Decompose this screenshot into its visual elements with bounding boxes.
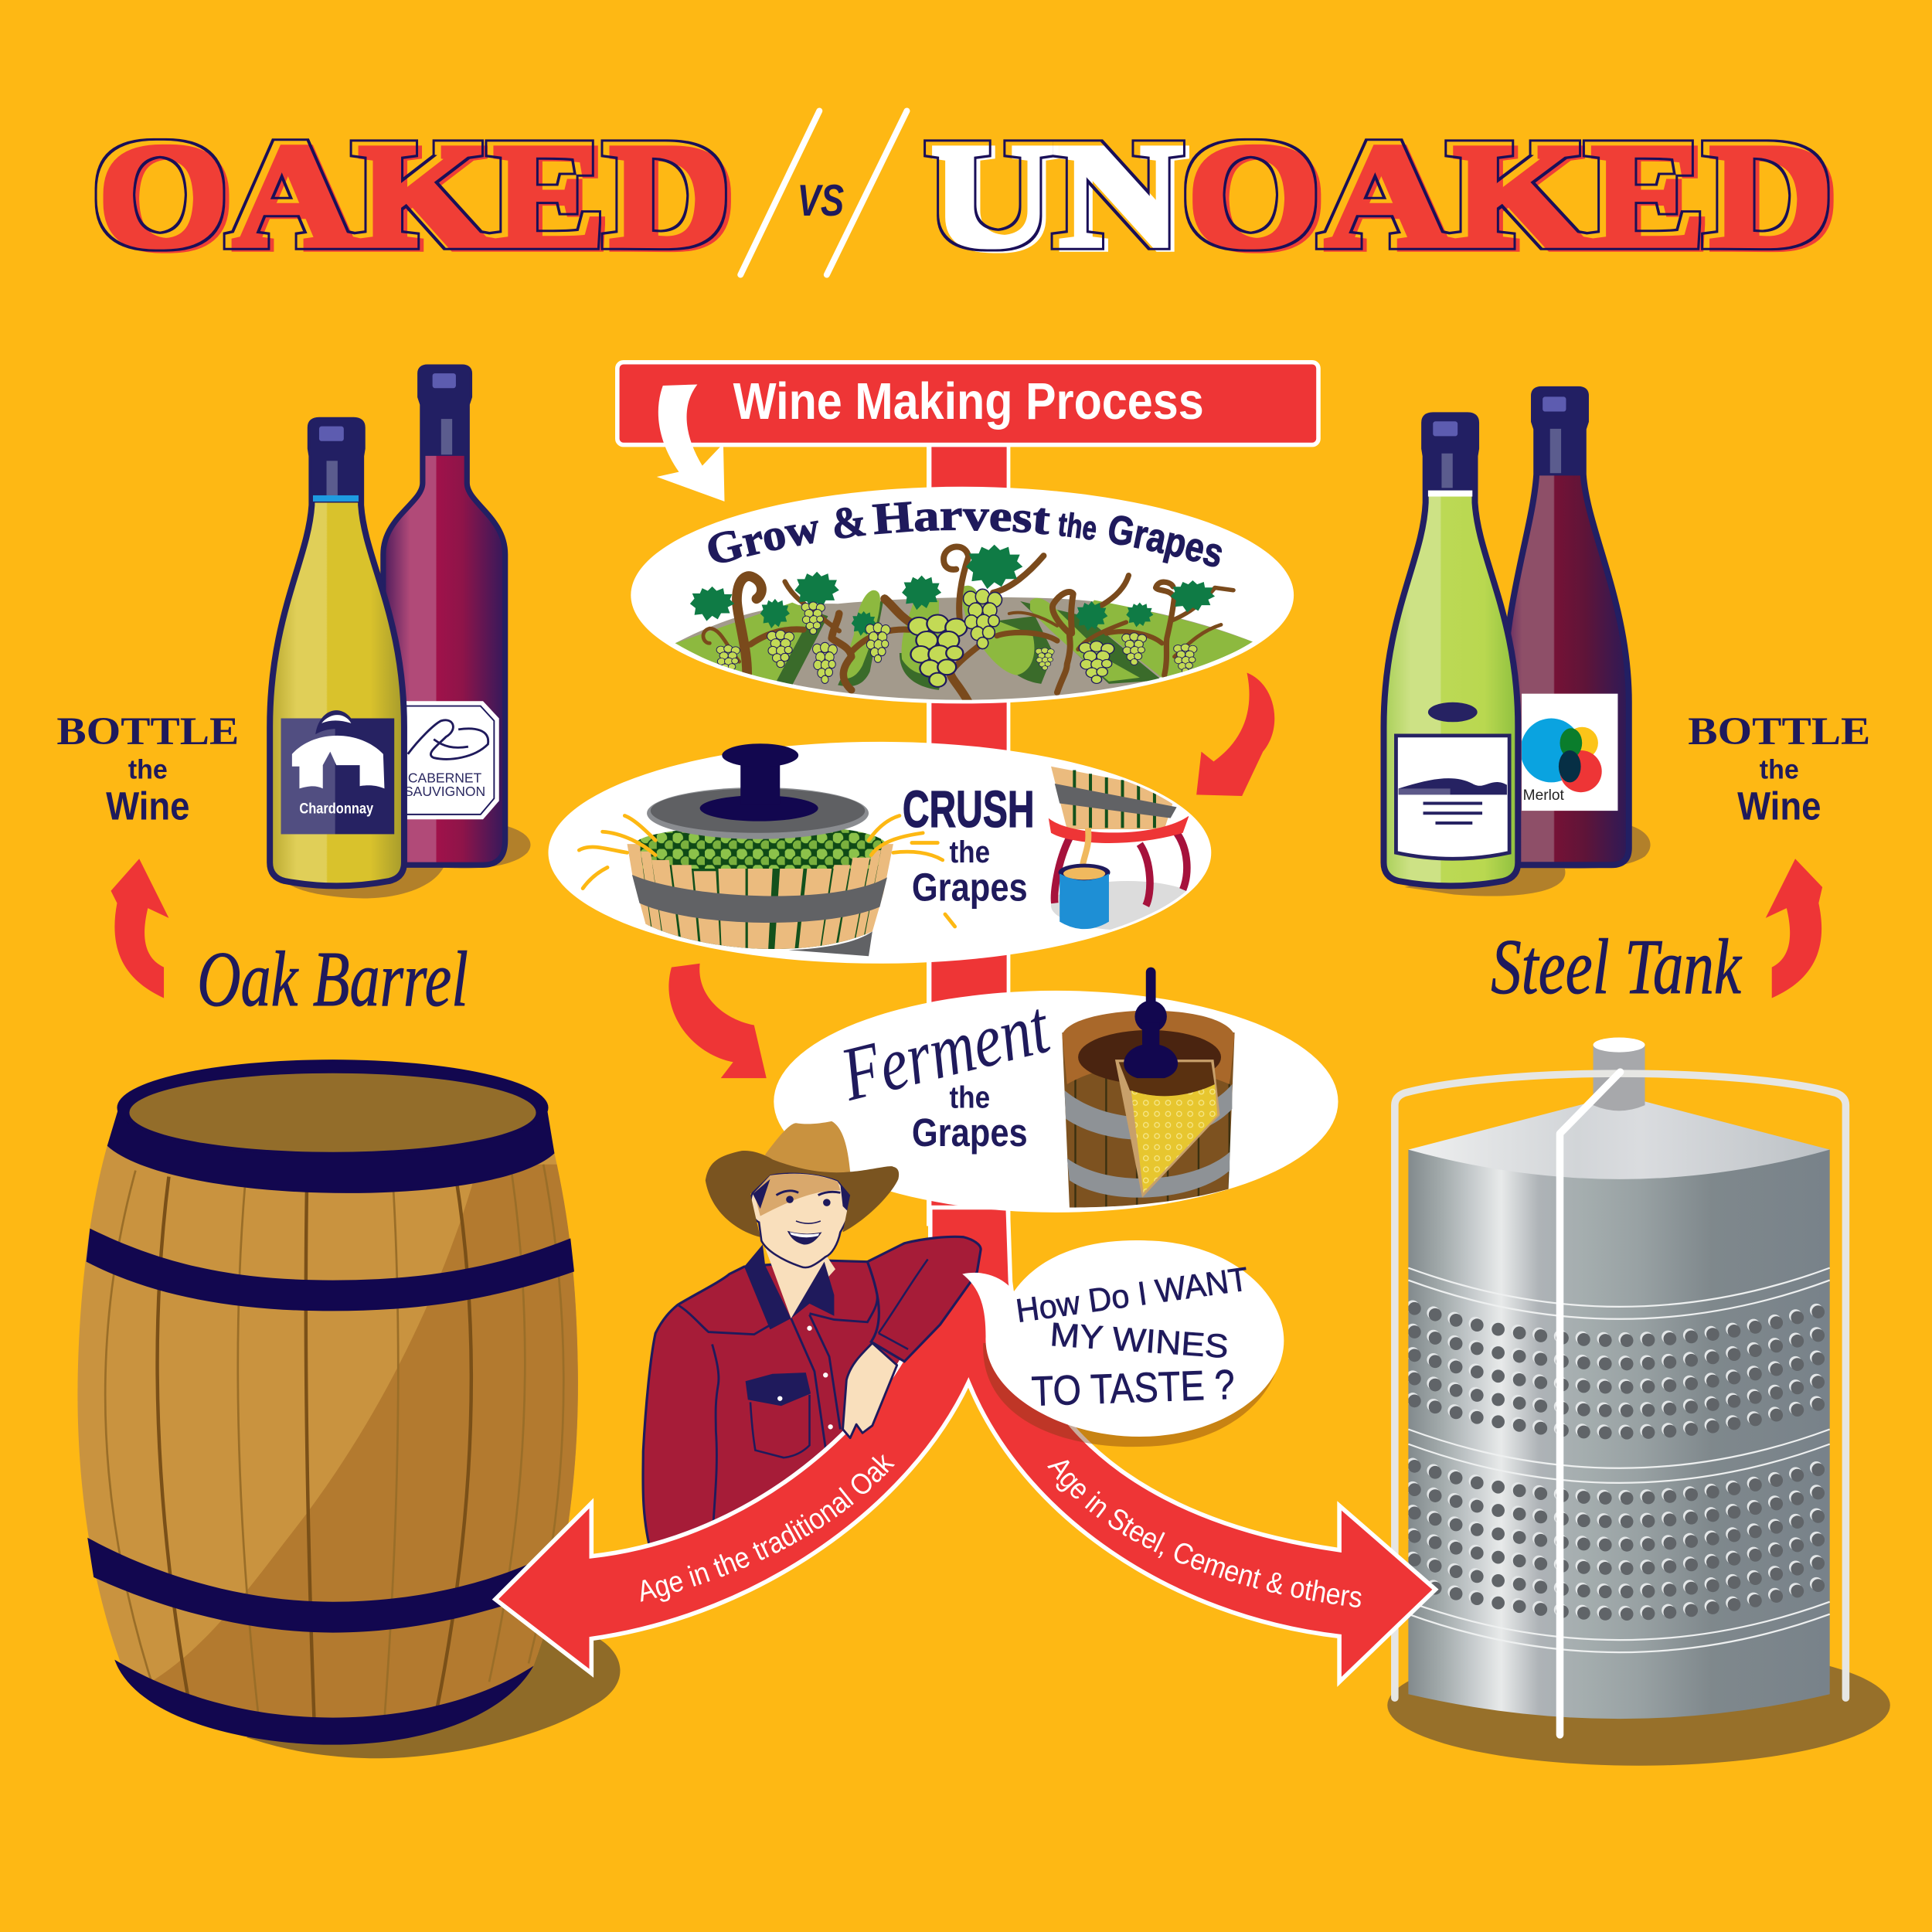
bubble text (1014, 1260, 1250, 1415)
process post (927, 437, 1010, 1226)
hair (753, 1179, 852, 1213)
perforations (1413, 1307, 1830, 1614)
crush text: Grapes (912, 865, 1028, 909)
arrow text: steel: Age in Steel, Cement & others (1047, 1460, 1362, 1607)
hat crown (765, 1121, 850, 1183)
tank body (1408, 1150, 1830, 1719)
tank shadow (1387, 1645, 1890, 1766)
sign: wine making process: Wine Making Process (733, 372, 1204, 430)
arrow text: oak: Age in the traditional Oak (641, 1454, 895, 1602)
hat shadow on forehead (754, 1174, 840, 1216)
crush text: CRUSH (903, 781, 1034, 838)
bubble shadow (983, 1343, 1281, 1447)
bottle the wine: left: Wine (106, 784, 190, 828)
hoop (632, 875, 887, 923)
label: cabernet (402, 701, 499, 819)
curved heading: grow and harvest the grapes: the (1059, 512, 1096, 540)
ferment vat (1062, 968, 1235, 1207)
collar (744, 1244, 834, 1329)
curved heading: grow and harvest the grapes: & (835, 507, 866, 539)
panel: crush (549, 742, 1211, 964)
bottle the wine: right: Wine (1737, 784, 1821, 828)
tank frame (1395, 1072, 1845, 1735)
press lid (647, 743, 869, 839)
arm (867, 1236, 981, 1362)
oak barrel (77, 1060, 620, 1762)
label: chardonnay (281, 710, 394, 834)
panel: ferment (774, 968, 1338, 1213)
arrow: crush to ferment (668, 964, 767, 1078)
small press with bucket (1049, 767, 1204, 930)
label: oak barrel: Oak Barrel (197, 936, 468, 1023)
word: OAKED: OAKED (93, 111, 730, 277)
tank cap (1594, 1037, 1645, 1111)
panel: grow and harvest (631, 487, 1294, 703)
staves (628, 844, 893, 949)
word: UNOAKED: UN OAKED (925, 111, 1832, 277)
juice splashes (579, 815, 955, 927)
double arrow: age in oak, age in steel (492, 1206, 1439, 1687)
tank cone (1408, 1101, 1830, 1179)
pocket (746, 1372, 811, 1458)
label: cabernet: SAUVIGNON (404, 784, 485, 799)
shadow (1405, 823, 1651, 896)
steel tank (1387, 1037, 1890, 1766)
bubble text: How Do I WANT (1014, 1260, 1250, 1330)
label: merlot: Merlot (1523, 787, 1564, 804)
bottle the wine: left (56, 710, 239, 828)
sleeve details (879, 1259, 928, 1349)
vineyard scene (675, 545, 1253, 705)
face (750, 1173, 852, 1267)
label: chardonnay: Chardonnay (299, 801, 373, 817)
bottle the wine: left: BOTTLE (56, 710, 239, 753)
arrow: oak barrel to bottle (111, 859, 168, 998)
label: green bottle (1396, 736, 1509, 859)
label: cabernet: CABERNET (408, 770, 482, 785)
speech bubble (962, 1240, 1284, 1447)
shirt details (678, 1262, 877, 1523)
barrel top (107, 1060, 554, 1193)
buttons (807, 1326, 833, 1429)
bubble text: TO TASTE ? (1031, 1362, 1236, 1415)
barrel hoops (87, 1229, 574, 1745)
bottle the wine: right: BOTTLE (1688, 710, 1870, 753)
barrel body (77, 1146, 591, 1762)
press basket (628, 825, 893, 961)
ferment text: Grapes (912, 1111, 1028, 1155)
bottle: merlot (1503, 389, 1629, 865)
grape pile (636, 825, 886, 893)
sign: wine making process (617, 362, 1318, 445)
barrel shadow (247, 1614, 620, 1758)
curved heading: grow and harvest the grapes (708, 502, 1223, 567)
curved heading: grow and harvest the grapes: Grapes (1109, 515, 1223, 567)
bottle the wine: left: the (128, 755, 168, 785)
left bottles (270, 367, 531, 898)
wedge (788, 931, 872, 956)
ferment text: the (949, 1080, 990, 1114)
farmer head and arm (706, 1121, 981, 1438)
slashes and vs (740, 111, 906, 275)
neck (764, 1244, 835, 1318)
bottle the wine: right (1688, 710, 1870, 828)
crush text (903, 781, 1034, 909)
curved heading: grow and harvest the grapes: Harvest (872, 502, 1050, 535)
bottle: chardonnay (270, 420, 404, 886)
arrow: grow to crush (1196, 673, 1274, 796)
title: Oaked vs Unoaked (93, 111, 1832, 277)
crush text: the (949, 835, 990, 869)
right bottles (1383, 389, 1651, 896)
shadow (290, 823, 531, 898)
farmer torso (643, 1260, 937, 1555)
bubble shape (962, 1240, 1284, 1437)
label: merlot (1520, 694, 1617, 811)
arrow: white, sign to grow (657, 384, 725, 502)
bubble text: MY WINES (1049, 1316, 1230, 1366)
curved heading: grow and harvest the grapes: Grow (708, 521, 818, 563)
bottle the wine: right: the (1760, 755, 1799, 785)
slashes and vs: VS (798, 176, 844, 226)
arrow: steel tank to bottle (1766, 859, 1822, 998)
ferment text (832, 985, 1059, 1155)
eyes and mouth (776, 1191, 840, 1244)
bottle: green white wine (1383, 415, 1518, 886)
hat brim (706, 1151, 899, 1237)
label: steel tank: Steel Tank (1491, 923, 1742, 1011)
bottle: cabernet sauvignon (383, 367, 505, 865)
ferment text: Ferment (832, 985, 1059, 1117)
hand (843, 1343, 897, 1438)
